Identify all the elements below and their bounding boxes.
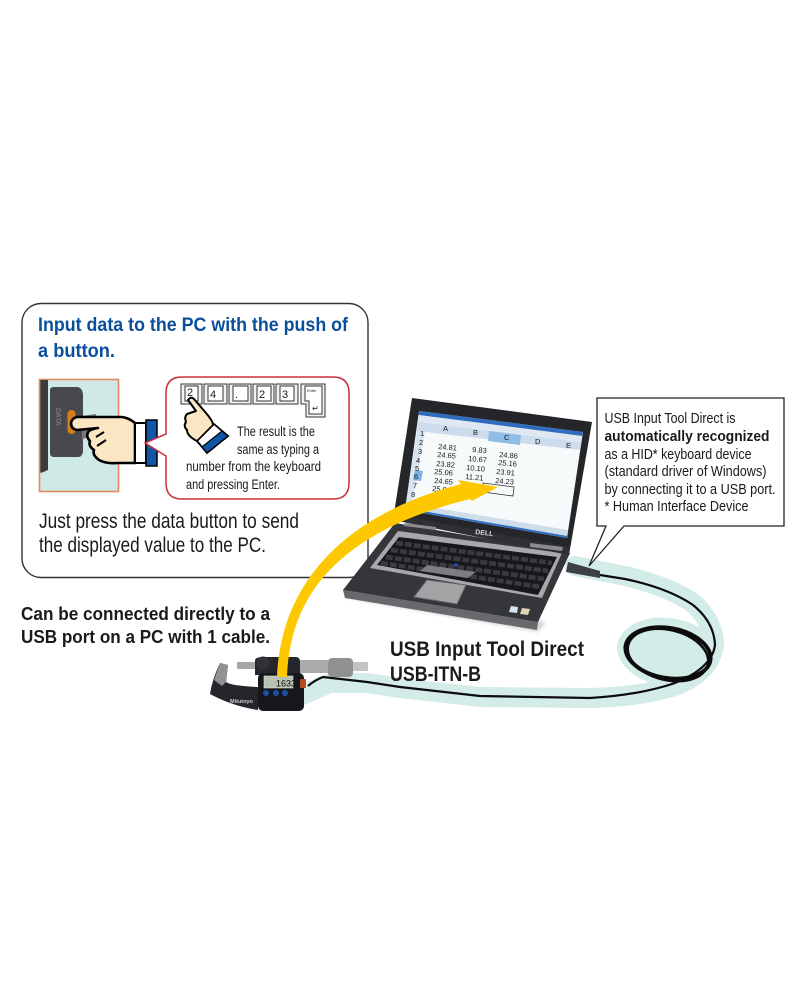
micrometer	[210, 656, 368, 711]
spreadsheet values	[411, 424, 571, 499]
micrometer: Mitutoyo	[230, 699, 254, 705]
spreadsheet values: 2	[419, 438, 423, 447]
spreadsheet values: 24.86	[499, 450, 518, 461]
spreadsheet values: 3	[418, 447, 422, 456]
heading: input data: a button.	[38, 340, 115, 362]
spreadsheet values: 25.0	[432, 484, 447, 494]
spreadsheet values: 4	[416, 456, 420, 465]
callout: same as typing	[145, 377, 349, 499]
key labels: 4	[210, 389, 216, 401]
note text: * Human Interface Device	[604, 499, 748, 515]
spreadsheet values: 10.10	[466, 463, 485, 474]
spreadsheet values: 23.91	[496, 467, 515, 478]
key labels: 3	[282, 389, 288, 401]
key labels: 2	[259, 389, 265, 401]
callout text	[186, 424, 321, 492]
arrow: data to laptop	[277, 480, 498, 677]
heading: input data	[38, 314, 348, 362]
teal cable highlight	[300, 566, 720, 698]
spreadsheet values: 5	[415, 464, 419, 473]
spreadsheet values: 24.23	[495, 476, 514, 487]
spreadsheet values: 10.67	[468, 454, 487, 465]
note text: by connecting it to a USB port.	[604, 482, 776, 498]
text: connection note: USB port on a PC with 1 cable.	[21, 626, 270, 647]
spreadsheet values: A	[443, 424, 448, 433]
spreadsheet values: 24.65	[434, 476, 453, 487]
keyboard rows	[381, 543, 552, 587]
text: just press the data button: the displayed value to the PC.	[39, 534, 266, 557]
callout text: The result is the	[237, 424, 315, 439]
key labels: Enter	[307, 388, 317, 393]
note text: as a HID* keyboard device	[604, 447, 752, 463]
spreadsheet values: B	[473, 428, 478, 437]
key labels: 2	[187, 387, 193, 399]
spreadsheet values: D	[535, 437, 541, 446]
USB plug	[566, 562, 600, 578]
key labels	[187, 387, 319, 413]
spreadsheet values: 24.81	[438, 442, 457, 453]
spreadsheet values: E	[566, 441, 571, 450]
spreadsheet values: 1	[420, 429, 424, 438]
callout text: and pressing Enter.	[186, 477, 280, 492]
micrometer cable and coil	[308, 575, 715, 698]
spreadsheet values: 7	[413, 481, 417, 490]
note text	[604, 411, 776, 515]
text: connection note: Can be connected directly to a	[21, 603, 271, 624]
micrometer: 1633	[276, 678, 296, 688]
spreadsheet values: 25.06	[434, 467, 453, 478]
spreadsheet values: 11.21	[465, 472, 484, 483]
laptop screen	[405, 411, 583, 538]
icon: small hand	[185, 398, 228, 453]
key labels: .	[235, 389, 238, 401]
laptop	[343, 398, 592, 632]
laptop: DELL	[475, 529, 494, 538]
spreadsheet values: 24.65	[437, 450, 456, 461]
spreadsheet values: 8	[411, 490, 415, 499]
keyboard keys	[181, 384, 325, 417]
note text: automatically recognized	[604, 429, 770, 445]
heading: input data: Input data to the PC with the push of	[38, 314, 348, 336]
note text: (standard driver of Windows)	[604, 464, 766, 480]
text: just press the data button: Just press the data button to send	[39, 510, 299, 533]
spreadsheet values: 25.16	[498, 458, 517, 469]
illustration: finger pressing data button	[40, 380, 157, 492]
note text: USB Input Tool Direct is	[604, 411, 736, 427]
product label	[390, 637, 584, 686]
spreadsheet values: 23.82	[436, 459, 455, 470]
laptop lid	[393, 398, 592, 555]
product label: USB-ITN-B	[390, 662, 481, 686]
spreadsheet values: C	[504, 433, 510, 442]
callout text: same as typing a	[237, 442, 319, 457]
spreadsheet values: 6	[414, 472, 418, 481]
illustration: finger pressing data button: DATA	[54, 408, 61, 426]
spreadsheet values: 9.83	[472, 445, 487, 455]
text: connection note	[21, 603, 271, 647]
panel: input data with a button	[22, 304, 368, 578]
text: just press the data button	[39, 510, 299, 557]
callout text: number from the keyboard	[186, 459, 321, 474]
note box	[589, 398, 784, 566]
key labels: ↵	[312, 404, 319, 413]
product label: USB Input Tool Direct	[390, 637, 584, 661]
